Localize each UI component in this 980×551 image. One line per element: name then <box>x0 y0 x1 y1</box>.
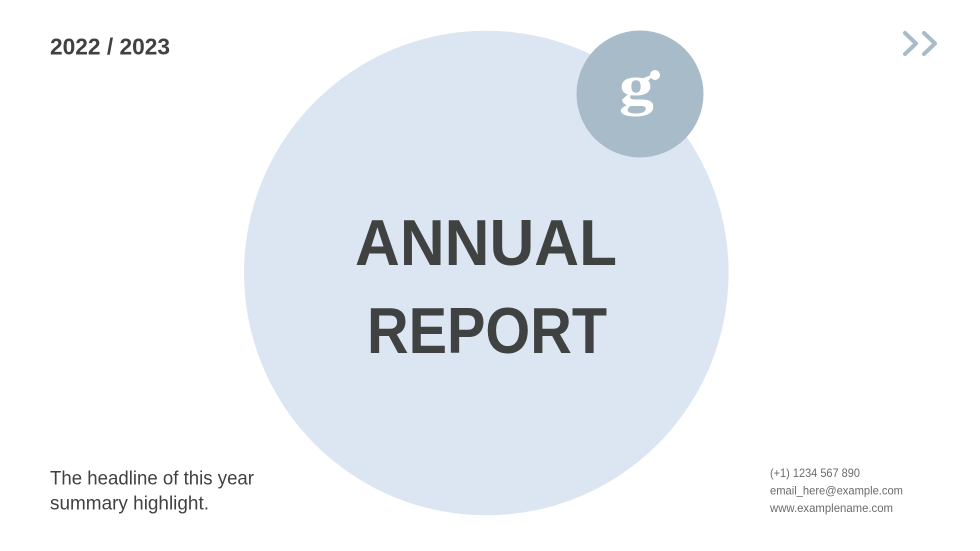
contact details <box>769 466 903 515</box>
headline text: summary highlight. <box>50 492 209 514</box>
title <box>355 206 617 367</box>
title: ANNUAL <box>355 206 617 279</box>
large background circle <box>244 31 729 515</box>
title: REPORT <box>367 294 607 367</box>
headline text <box>50 468 254 514</box>
icon: double chevron arrow <box>905 33 935 54</box>
headline text: The headline of this year <box>50 468 254 490</box>
logo letter g: g <box>619 55 654 117</box>
contact details: www.examplename.com <box>769 501 893 515</box>
year label: 2022 / 2023 <box>50 34 170 60</box>
logo badge <box>576 30 704 158</box>
contact details: email_here@example.com <box>770 484 903 498</box>
contact details: (+1) 1234 567 890 <box>770 466 860 480</box>
